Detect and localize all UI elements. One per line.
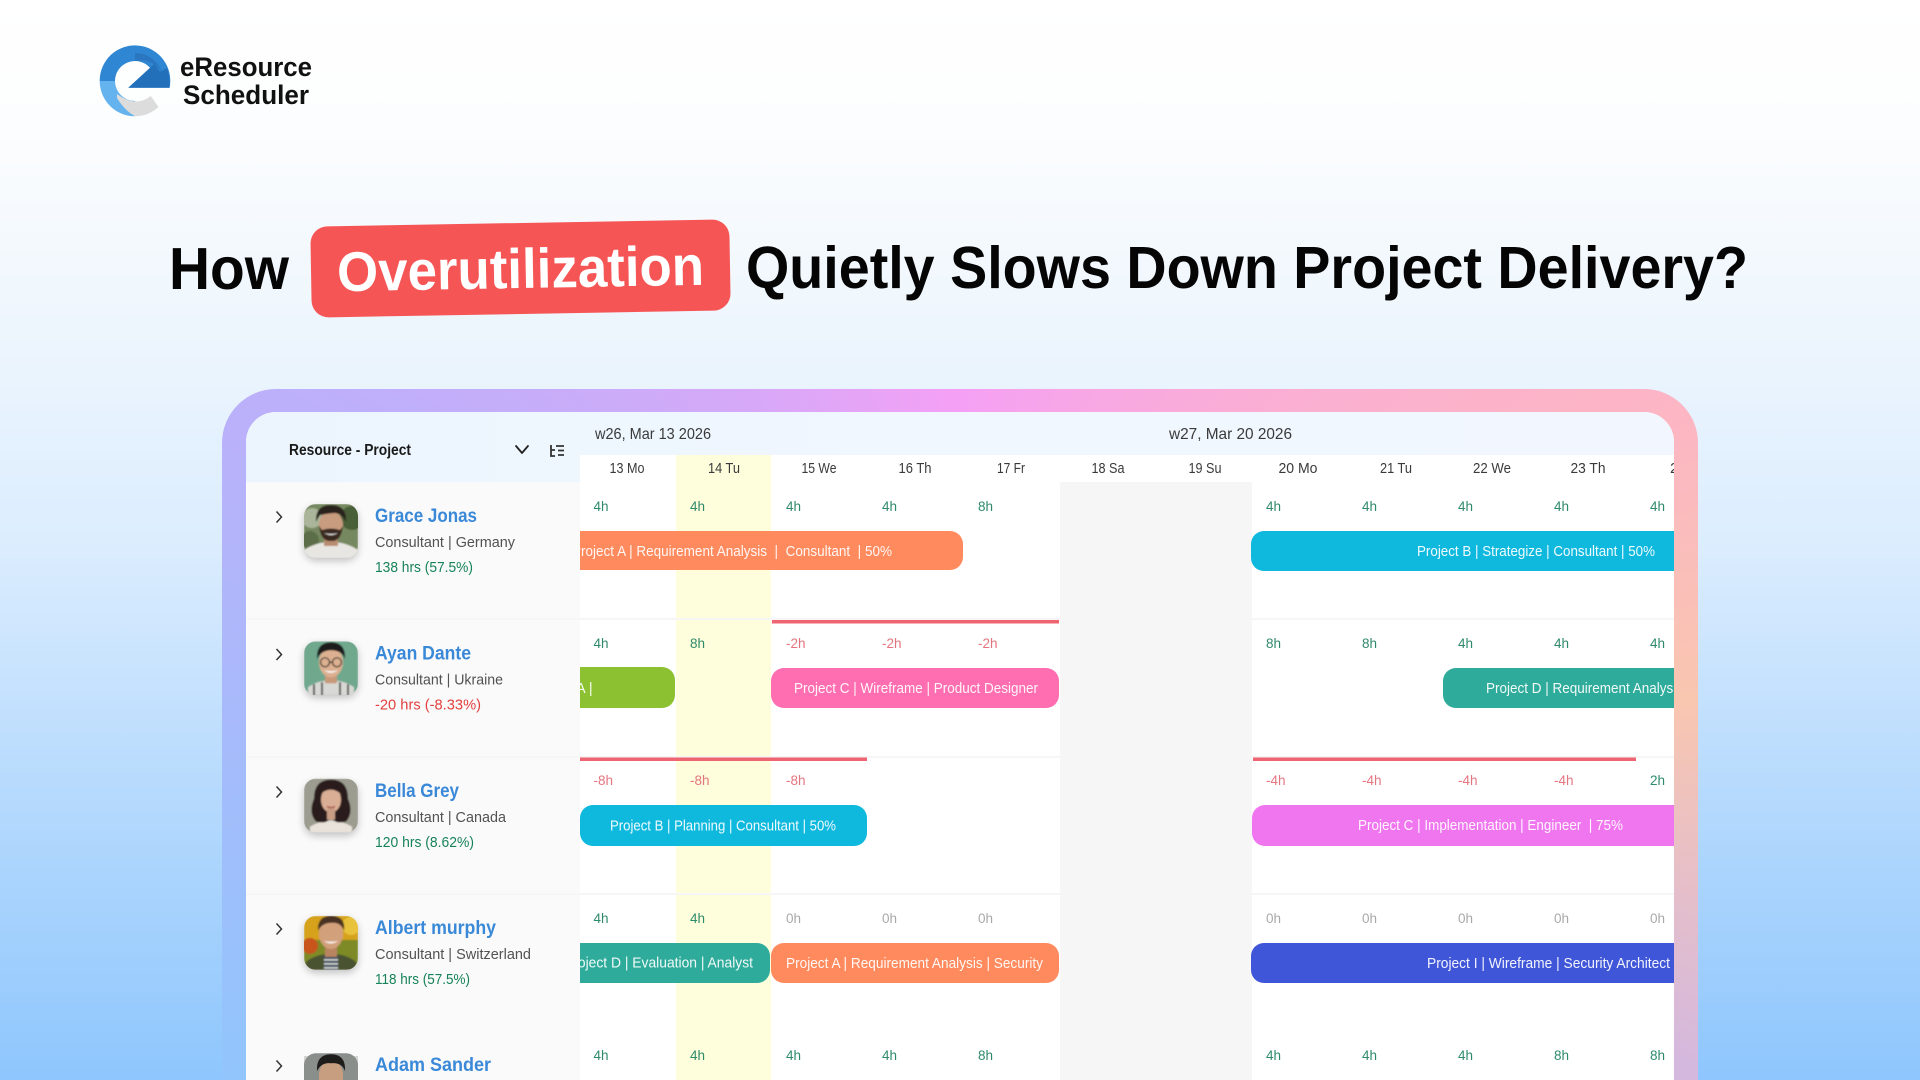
resource row: Grace Jonas: Grace Jonas: [375, 505, 477, 527]
hours row: Albert murphy: 0h: [1458, 911, 1473, 926]
hours row: Bella Grey: [594, 775, 1664, 785]
resource row: Ayan Dante: [276, 641, 503, 714]
resource row: Ayan Dante: Ayan Dante: [375, 642, 471, 664]
schedule grid: [564, 499, 1683, 1063]
day labels: [610, 462, 1674, 473]
hours row: Grace Jonas: 4h: [594, 499, 609, 514]
resource row: Bella Grey: [276, 779, 507, 851]
week labels: w26, Mar 13 2026: [594, 426, 711, 443]
avatar: Ayan Dante: [304, 641, 358, 695]
title highlight badge: Overutilization: [310, 219, 731, 318]
resource row: Ayan Dante: -20 hrs (-8.33%): [375, 696, 481, 714]
title highlight badge: Overutilization: Overutilization: [336, 234, 705, 303]
bar: Project I Albert: Project I | Wireframe | Security Architect: [1427, 956, 1670, 972]
day labels: 19 Su: [1188, 460, 1222, 477]
resource row: Albert murphy: Albert murphy: [375, 917, 496, 939]
gradient frame around scheduler: [222, 389, 1698, 1080]
resource row: Albert murphy: [276, 916, 531, 988]
bar: Project D Ayan: [1443, 668, 1683, 708]
title: [169, 219, 1748, 318]
icon: list settings: [551, 445, 564, 456]
hours row: Adam Sander: 4h: [690, 1048, 705, 1063]
hours row: Ayan Dante: 4h: [1458, 636, 1473, 651]
icon: dropdown chevron: [516, 446, 528, 453]
resource row: Ayan Dante: Consultant | Ukraine: [375, 672, 503, 688]
avatar: Adam Sander: [304, 1053, 358, 1080]
hours row: Bella Grey: 2h: [1650, 773, 1665, 788]
hours row: Bella Grey: -4h: [1554, 773, 1574, 788]
day labels: 21 Tu: [1380, 460, 1412, 477]
resource row: Adam Sander: [276, 1053, 491, 1080]
hours row: Adam Sander: 8h: [1554, 1048, 1569, 1063]
hours row: Bella Grey: -8h: [786, 773, 806, 788]
bar: green stub Ayan: A |: [576, 681, 593, 697]
hours row: Albert murphy: 0h: [1650, 911, 1665, 926]
resource header: [290, 444, 564, 458]
hours row: Bella Grey: -4h: [1266, 773, 1286, 788]
hours row: Bella Grey: -8h: [690, 773, 710, 788]
over-allocation indicator lines: [580, 620, 1636, 761]
bar: Project B Grace: [1251, 531, 1674, 571]
hours row: Albert murphy: 0h: [978, 911, 993, 926]
day labels: 14 Tu: [708, 460, 740, 477]
avatar: Albert murphy: [302, 916, 360, 970]
bar: Project C Ayan: [771, 668, 1059, 708]
hours row: Adam Sander: 4h: [594, 1048, 609, 1063]
weekend column: [1060, 482, 1252, 1080]
bar: Project A Grace: [572, 531, 963, 570]
hours row: Grace Jonas: 4h: [1554, 499, 1569, 514]
hours row: Bella Grey: -8h: [594, 773, 613, 788]
hours row: Albert murphy: 0h: [1554, 911, 1569, 926]
hours row: Grace Jonas: 8h: [978, 499, 993, 514]
title: Quietly Slows Down Project Delivery?: [746, 235, 1748, 301]
top header band: [246, 412, 1674, 482]
bar: Project B Bella: [580, 805, 867, 846]
hours row: Albert murphy: 0h: [1362, 911, 1377, 926]
resource row: Albert murphy: Consultant | Switzerland: [375, 946, 531, 963]
logo: eResource Scheduler: [100, 45, 312, 116]
bar: Project C Ayan: Project C | Wireframe | Product Designer: [794, 681, 1038, 697]
hours row: Adam Sander: 8h: [978, 1048, 993, 1063]
hours row: Albert murphy: 4h: [594, 911, 609, 926]
hours row: Ayan Dante: 4h: [594, 636, 609, 651]
hours row: Grace Jonas: 4h: [1362, 499, 1377, 514]
hours row: Albert murphy: 0h: [1266, 911, 1281, 926]
logo wordmark: eResource: [180, 52, 312, 82]
hours row: Grace Jonas: 4h: [786, 499, 801, 514]
logo wordmark: [180, 52, 312, 110]
hours row: Adam Sander: 4h: [1362, 1048, 1377, 1063]
bar: Project D Albert: [564, 943, 770, 983]
hours row: Grace Jonas: 4h: [690, 499, 705, 514]
bar: Project I Albert: [1251, 943, 1674, 983]
bar: green stub Ayan: [576, 667, 675, 708]
hours row: Adam Sander: 4h: [1266, 1048, 1281, 1063]
bar: Project A Grace: Project A | Requirement Analysis | Consultant | 50%: [572, 544, 892, 560]
bar: Project A Albert: Project A | Requirement Analysis | Security: [786, 956, 1044, 972]
day labels: 20 Mo: [1278, 460, 1318, 477]
hours row: Albert murphy: [594, 913, 1664, 923]
resource row: Grace Jonas: Consultant | Germany: [375, 534, 515, 551]
icon: e logo mark: [100, 45, 170, 116]
hours row: Grace Jonas: [594, 501, 1664, 511]
hours row: Adam Sander: 4h: [786, 1048, 801, 1063]
avatar: Bella Grey: [304, 779, 358, 833]
hours row: Ayan Dante: 8h: [690, 636, 705, 651]
week labels: w27, Mar 20 2026: [1168, 426, 1292, 443]
hours row: Albert murphy: 0h: [786, 911, 801, 926]
bar: Project D Ayan: Project D | Requirement Analysis: [1486, 681, 1683, 697]
hours row: Ayan Dante: -2h: [882, 636, 902, 651]
bar: Project C Bella: Project C | Implementation | Engineer | 75%: [1358, 818, 1623, 834]
hours row: Grace Jonas: 4h: [1266, 499, 1281, 514]
day labels: 13 Mo: [610, 460, 644, 477]
hours row: Ayan Dante: 4h: [1650, 636, 1665, 651]
hours row: Grace Jonas: 4h: [1458, 499, 1473, 514]
bar: Project B Bella: Project B | Planning | Consultant | 50%: [610, 818, 836, 834]
resource header: Resource - Project: [289, 442, 411, 459]
highlighted today column: [676, 455, 771, 1080]
hours row: Ayan Dante: 4h: [1554, 636, 1569, 651]
avatar: Grace Jonas: [304, 504, 358, 558]
hours row: Grace Jonas: 4h: [882, 499, 897, 514]
hours row: Albert murphy: 4h: [690, 911, 705, 926]
week labels: [595, 428, 1292, 441]
hours row: Bella Grey: -4h: [1362, 773, 1382, 788]
hours row: Ayan Dante: -2h: [786, 636, 806, 651]
resource row: Grace Jonas: [276, 504, 515, 576]
hours row: Albert murphy: 0h: [882, 911, 897, 926]
bar: Project D Albert: Project D | Evaluation | Analyst: [564, 956, 753, 972]
bar: Project C Bella: [1252, 805, 1674, 846]
day header strip: [580, 455, 1674, 482]
hours row: Grace Jonas: 4h: [1650, 499, 1665, 514]
resource row: Bella Grey: Consultant | Canada: [375, 809, 507, 826]
hours row: Ayan Dante: 8h: [1362, 636, 1377, 651]
resource row: Grace Jonas: 138 hrs (57.5%): [375, 559, 473, 576]
hours row: Adam Sander: 4h: [1458, 1048, 1473, 1063]
day labels: 23 Th: [1570, 460, 1606, 477]
hours row: Adam Sander: [594, 1050, 1664, 1060]
hours row: Ayan Dante: 8h: [1266, 636, 1281, 651]
resource row: Albert murphy: 118 hrs (57.5%): [375, 971, 470, 988]
hours row: Ayan Dante: -2h: [978, 636, 998, 651]
day labels: 18 Sa: [1092, 460, 1125, 477]
resource row: Bella Grey: Bella Grey: [375, 780, 459, 802]
hours row: Adam Sander: 8h: [1650, 1048, 1665, 1063]
logo wordmark: Scheduler: [183, 80, 309, 110]
panel: resource scheduler: [246, 412, 1705, 1080]
day labels: 24 Fr: [1670, 460, 1705, 477]
bar: Project A Albert: [771, 943, 1059, 983]
hours row: Bella Grey: -4h: [1458, 773, 1478, 788]
resource row: Adam Sander: Adam Sander: [375, 1054, 491, 1076]
bar: Project B Grace: Project B | Strategize | Consultant | 50%: [1417, 544, 1655, 560]
day labels: 22 We: [1473, 460, 1511, 477]
day labels: 15 We: [802, 460, 836, 477]
resource row: Bella Grey: 120 hrs (8.62%): [375, 834, 474, 851]
hours row: Ayan Dante: [594, 638, 1664, 648]
day labels: 16 Th: [898, 460, 932, 477]
resource column background: [246, 482, 580, 1080]
hours row: Adam Sander: 4h: [882, 1048, 897, 1063]
day labels: 17 Fr: [997, 460, 1025, 477]
title: How: [169, 236, 289, 302]
